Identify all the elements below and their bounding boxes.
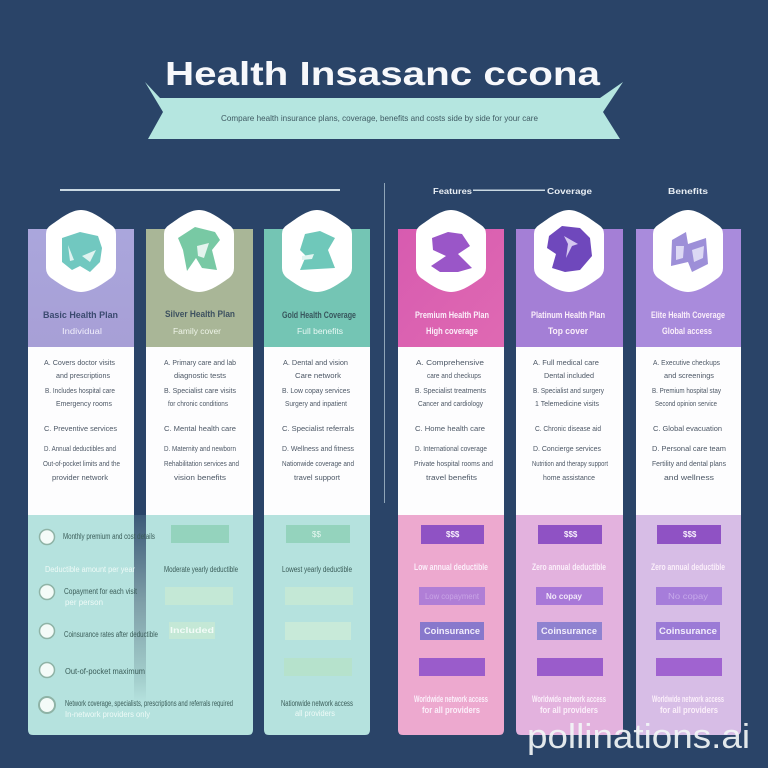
watermark: pollinations.ai: [527, 718, 750, 756]
plan 6 feature rows: $$$: [683, 530, 697, 539]
right section headings: Benefits: [668, 187, 709, 196]
plan 1 feature rows: In-network providers only: [65, 710, 150, 719]
plan 2 benefit list: for chronic conditions: [168, 399, 228, 408]
plan 4 benefit list: Cancer and cardiology: [418, 399, 483, 408]
plan 2 heading: [165, 309, 235, 336]
plan 4 heading: Premium Health Plan: [415, 310, 489, 320]
plan 2 benefit list: D. Maternity and newborn: [164, 444, 236, 453]
plan 1 feature rows: Network coverage, specialists, prescriptions and referrals required: [65, 699, 233, 708]
plan 3 heading: [282, 310, 356, 336]
plan 1 feature rows: [39, 530, 233, 719]
plan 1 feature rows: Deductible amount per year: [45, 565, 135, 574]
panel: plan 1: [28, 210, 134, 735]
plan 3 feature rows: Nationwide network access: [281, 699, 353, 708]
center divider: [384, 183, 385, 503]
plan 6 feature rows: Worldwide network access: [652, 694, 724, 704]
plan 2 feature rows: Moderate yearly deductible: [164, 565, 238, 574]
plan 4 benefit list: Private hospital rooms and: [414, 459, 493, 468]
plan 1 benefit list: C. Preventive services: [44, 424, 117, 433]
plan 1 benefit list: A. Covers doctor visits: [44, 358, 115, 367]
plan 2 heading: Family cover: [173, 327, 221, 336]
plan 4 benefit list: care and checkups: [427, 371, 481, 380]
plan 3 benefit list: [282, 358, 354, 482]
plan 2 benefit list: A. Primary care and lab: [164, 358, 236, 367]
right section headings: [433, 187, 709, 196]
plan 6 heading: Global access: [662, 326, 712, 336]
plan 4 benefit list: B. Specialist treatments: [415, 386, 486, 395]
plan 5 feature rows: Worldwide network access: [532, 694, 606, 704]
plan 1 heading: [43, 310, 118, 336]
plan 6 benefit list: Second opinion service: [655, 399, 717, 408]
plan 4 feature rows: Low annual deductible: [414, 562, 488, 572]
plan 3 benefit list: Nationwide coverage and: [282, 459, 354, 468]
plan 1 heading: Individual: [62, 327, 102, 336]
plan 3 benefit list: B. Low copay services: [282, 386, 350, 395]
plan 6 feature rows: for all providers: [660, 705, 718, 715]
subtitle: Compare health insurance plans, coverage, benefits and costs side by side for your care: [221, 113, 538, 123]
plan 6 feature rows: Zero annual deductible: [651, 562, 725, 572]
title: Health Insasanc ccona: [165, 55, 601, 92]
plan 1 feature rows: Monthly premium and cost details: [63, 532, 155, 541]
panel: plan 5: [516, 210, 623, 735]
plan 4 feature rows: Coinsurance: [424, 626, 480, 636]
plan 6 heading: Elite Health Coverage: [651, 310, 725, 320]
plan 2 benefit list: [164, 358, 239, 482]
plan 3 heading: Full benefits: [297, 327, 343, 336]
plan 2 benefit list: C. Mental health care: [164, 424, 236, 433]
plan 3 feature rows: Lowest yearly deductible: [282, 565, 352, 574]
plan 3 feature rows: [281, 525, 353, 718]
plan 1 benefit list: Out-of-pocket limits and the: [43, 459, 120, 468]
plan 1 feature rows: per person: [65, 598, 103, 607]
plan 5 benefit list: C. Chronic disease aid: [535, 424, 601, 433]
plan 6 feature rows: Coinsurance: [659, 626, 717, 636]
plan 6 benefit list: and screenings: [664, 371, 714, 380]
plan 5 feature rows: $$$: [564, 530, 578, 539]
plan 3 heading: Gold Health Coverage: [282, 310, 356, 320]
icon: plan 2 badge: [164, 210, 234, 292]
plan 5 benefit list: A. Full medical care: [533, 358, 599, 367]
plan 5 heading: Platinum Health Plan: [531, 310, 605, 320]
left section rule: [60, 189, 340, 191]
plan 1 benefit list: provider network: [52, 473, 108, 482]
plan 5 feature rows: No copay: [546, 592, 583, 601]
right section headings: Coverage: [547, 187, 593, 196]
plan 5 benefit list: Nutrition and therapy support: [532, 459, 609, 468]
plan 4 feature rows: $$$: [446, 530, 460, 539]
plan 2 benefit list: Rehabilitation services and: [164, 459, 239, 468]
icon: plan 5 badge: [534, 210, 604, 292]
plan 6 benefit list: Fertility and dental plans: [652, 459, 726, 468]
plan 5 benefit list: [532, 358, 609, 482]
plan 2 feature rows: [164, 525, 238, 639]
plan 6 benefit list: C. Global evacuation: [653, 424, 722, 433]
icon: plan 4 badge: [416, 210, 486, 292]
plan 2 benefit list: vision benefits: [174, 473, 226, 482]
plan 5 benefit list: Dental included: [544, 371, 594, 380]
plan 3 feature rows: all providers: [295, 709, 335, 718]
plan 5 feature rows: [532, 525, 606, 715]
plan 1 feature rows: Out-of-pocket maximum: [65, 667, 145, 676]
plan 2 heading: Silver Health Plan: [165, 309, 235, 319]
plan 5 benefit list: D. Concierge services: [533, 444, 601, 453]
plan 3 benefit list: Surgery and inpatient: [285, 399, 348, 408]
plan 4 feature rows: Worldwide network access: [414, 694, 488, 704]
plan 6 benefit list: B. Premium hospital stay: [652, 386, 721, 395]
plan 2 benefit list: B. Specialist care visits: [164, 386, 236, 395]
plan 4 heading: [415, 310, 489, 336]
icon: plan 6 badge: [653, 210, 723, 292]
plan 4 benefit list: travel benefits: [426, 473, 477, 482]
plan 3 benefit list: D. Wellness and fitness: [282, 444, 354, 453]
plan 5 benefit list: 1 Telemedicine visits: [535, 399, 599, 408]
plan 1 feature rows: Coinsurance rates after deductible: [64, 630, 158, 639]
plan 1 benefit list: B. Includes hospital care: [45, 386, 115, 395]
plan 1 heading: Basic Health Plan: [43, 310, 118, 320]
plan 6 feature rows: [651, 525, 725, 715]
plan 1 feature rows: Copayment for each visit: [64, 587, 138, 596]
plan 6 benefit list: and wellness: [664, 473, 714, 482]
plan 4 benefit list: A. Comprehensive: [416, 358, 484, 367]
panel: plan 4: [398, 210, 504, 735]
plan 1 benefit list: Emergency rooms: [56, 399, 112, 408]
icon: plan 1 badge: [46, 210, 116, 292]
plan 3 feature rows: $$: [312, 530, 321, 539]
plan 6 benefit list: [652, 358, 726, 482]
strip between panels one and two: [134, 515, 146, 735]
plan 1 benefit list: D. Annual deductibles and: [44, 444, 116, 453]
panel: plan 6: [636, 210, 741, 735]
plan 4 benefit list: C. Home health care: [415, 424, 485, 433]
plan 5 heading: [531, 310, 605, 336]
icon: plan 3 badge: [282, 210, 352, 292]
plan 6 benefit list: A. Executive checkups: [653, 358, 720, 367]
plan 4 benefit list: D. International coverage: [415, 444, 487, 453]
plan 4 benefit list: [414, 358, 493, 482]
plan 5 feature rows: for all providers: [540, 705, 598, 715]
plan 3 benefit list: travel support: [294, 473, 341, 482]
plan 2 benefit list: diagnostic tests: [174, 371, 226, 380]
plan 6 heading: [651, 310, 725, 336]
plan 5 benefit list: home assistance: [543, 473, 595, 482]
plan 4 feature rows: [414, 525, 488, 715]
plan 4 feature rows: Low copayment: [425, 592, 480, 601]
banner ribbon: [145, 55, 623, 139]
plan 5 heading: Top cover: [548, 326, 588, 336]
plan 5 feature rows: Coinsurance: [541, 626, 597, 636]
right section headings: Features: [433, 187, 473, 196]
panel: plan 2: [146, 210, 253, 735]
plan 5 benefit list: B. Specialist and surgery: [533, 386, 604, 395]
panel: plan 3: [264, 210, 370, 735]
plan 1 benefit list: and prescriptions: [56, 371, 110, 380]
plan 2 feature rows: Included: [170, 626, 214, 635]
plan 1 benefit list: [43, 358, 120, 482]
plan 6 feature rows: No copay: [668, 592, 708, 601]
plan 3 benefit list: Care network: [295, 371, 341, 380]
plan 4 heading: High coverage: [426, 326, 478, 336]
plan 4 feature rows: for all providers: [422, 705, 480, 715]
plan 3 benefit list: C. Specialist referrals: [282, 424, 354, 433]
plan 6 benefit list: D. Personal care team: [652, 444, 726, 453]
plan 5 feature rows: Zero annual deductible: [532, 562, 606, 572]
plan 3 benefit list: A. Dental and vision: [283, 358, 348, 367]
